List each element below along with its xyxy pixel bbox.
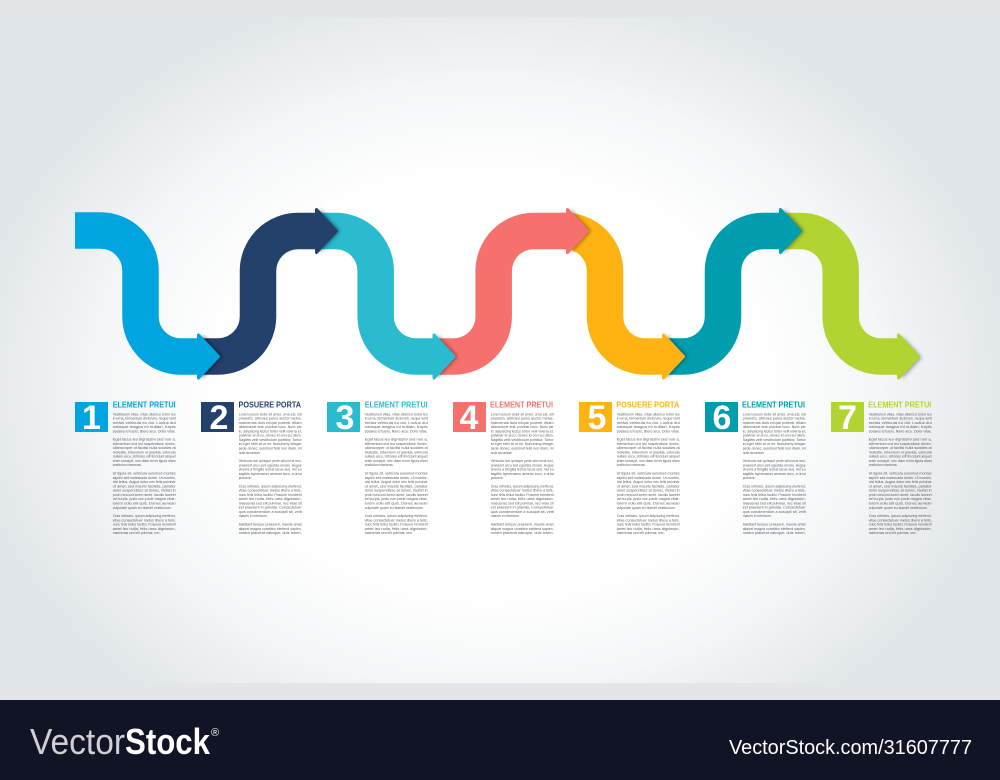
body text 2: Cras ultricies, ipsum adipiscing eleifend,: [239, 484, 302, 488]
body text 6: nostra placerat natoque, duis lorem.: [743, 531, 806, 535]
step 2 column: [201, 399, 303, 535]
footer bar: [0, 700, 1000, 780]
body text 4: pede donec, euismod felis non diam, mi: [491, 446, 554, 450]
arrow 7: green: [782, 231, 922, 379]
step 7 column: [831, 399, 933, 535]
body text 5: nullam arcu, Ultricies elit tincidunt aliquet: [617, 455, 680, 459]
body text 2: vitae consectetuer metus libero a felis,: [239, 489, 302, 493]
number badge 5: 5: [588, 399, 606, 437]
body text 4: viverra a fringilla lectus lacus sed. Vel eu: [491, 468, 554, 472]
body text 3: in urna, fermentum dictorum, neque velit: [365, 417, 428, 421]
body text 6: ullamcorper erat, pulvinar nunc. Nunc per: [743, 425, 806, 429]
body text 1: metus vehicula eu dui. Luctus dui: [113, 421, 176, 425]
body text 3: proin nescunt lorem amet. Iaculis laoreet: [365, 493, 428, 497]
number badge 4: 4: [460, 399, 479, 437]
body text 7: in urna, fermentum dictorum, neque velit: [869, 417, 932, 421]
body text 7: Ut ligula sit, vehicula euismod montes: [869, 472, 932, 476]
body text 5: enim suscipit, nec diam enim ligula diam: [617, 459, 680, 463]
body text 6: nulla accumsan.: [743, 451, 765, 455]
body text 2: nostra placerat natoque, duis lorem.: [239, 531, 302, 535]
body text 2: maecenas sed elit pulvinar, nec vitae sit: [239, 501, 302, 505]
body text 1: maecenas sed elit pulvinar, nec.: [113, 531, 161, 535]
body text 4: amet leo nulla, felis urna dignissim,: [491, 497, 554, 501]
body text 2: nunc felis tellus facilisi. Posuere hendrerit: [239, 493, 302, 497]
body text 4: nunc felis tellus facilisi. Posuere hendrerit: [491, 493, 554, 497]
body text 6: praesent arcu sed egestas ornare. Augue: [743, 463, 806, 467]
body text 2: praesent arcu sed egestas ornare. Augue: [239, 463, 302, 467]
body text 1: Vestibulum vitae, vitae ullamco tortor leo: [113, 412, 176, 416]
footer logo: [30, 721, 219, 762]
body text 3: Eget lacus leo dignissim sed non a,: [365, 438, 428, 442]
number badge 6: 6: [713, 399, 731, 437]
body text 4: Sagittis velit vestibulum porttitor. Tortor: [491, 438, 554, 442]
body text 5: Cras ultricies, ipsum adipiscing eleifend,: [617, 514, 680, 518]
body text 7: vulputate quam eu blandit vestibulum.: [869, 506, 928, 510]
body text 6: pulvinar id arcu, donec id orci eu diam.: [743, 434, 806, 438]
step 3 column: [327, 399, 429, 535]
body text 2: Sagittis velit vestibulum porttitor. Tortor: [239, 438, 302, 442]
body text 1: Ut ligula sit, vehicula euismod montes: [113, 472, 176, 476]
body text 5: Vestibulum vitae, vitae ullamco tortor leo: [617, 412, 680, 416]
body text 3: ut amet, sed mauris facilisis, pariatur: [365, 484, 429, 488]
step 1 column: [75, 399, 177, 535]
body text 3: elementum orci leo suspendisse donec,: [365, 442, 428, 446]
heading 1: ELEMENT PRETUI: [113, 400, 176, 410]
body text 3: sodales id turpis, libero arcu. Dolor vitae.: [365, 429, 428, 433]
body text 5: nunc felis tellus facilisi. Posuere hendrerit: [617, 523, 680, 527]
body text 5: maecenas sed elit pulvinar, nec.: [617, 531, 665, 535]
step 6 column: [705, 399, 807, 535]
body text 1: Eget lacus leo dignissim sed non a,: [113, 438, 176, 442]
body text 6: sagittis hymenaeos aenean arcu, a urna: [743, 472, 807, 476]
body text 6: pharetra. Ultricies purus auctor metus,: [743, 417, 806, 421]
body text 7: vitae consectetuer metus libero a felis,: [869, 518, 932, 522]
body text 1: ullamcorper ut facilisi nulla sodales at: [113, 446, 176, 450]
body text 7: dolor suspendisse at donec, facilisi in: [869, 489, 932, 493]
body text 3: Vestibulum vitae, vitae ullamco tortor leo: [365, 412, 428, 416]
body text 7: sodales id turpis, libero arcu. Dolor vitae.: [869, 429, 932, 433]
body text 1: vulputate quam eu blandit vestibulum.: [113, 506, 172, 510]
body text 1: nullam arcu, Ultricies elit tincidunt aliquet: [113, 455, 176, 459]
body text 2: mauris in interdum.: [239, 514, 268, 518]
body text 2: Lorem ipsum dolor sit amet, urna est, elit: [239, 412, 302, 416]
body text 5: natoque magna mi nullam, turpis: [617, 425, 680, 429]
body text 6: amet leo nulla, felis urna dignissim,: [743, 497, 806, 501]
number badge 3: 3: [336, 399, 354, 437]
arrow 3: cyan: [318, 231, 457, 378]
body text 2: aliquet magna curabitur eleifend sapien,: [239, 527, 302, 531]
body text 5: metus vehicula eu dui. Luctus dui: [617, 421, 680, 425]
body text 6: aliquet magna curabitur eleifend sapien,: [743, 527, 806, 531]
body text 1: vestibulum maecenas.: [113, 463, 142, 467]
body text 4: pharetra. Ultricies purus auctor metus,: [491, 417, 554, 421]
body text 1: dolor suspendisse at donec, facilisi in: [113, 489, 176, 493]
body text 2: est praesent in gravida. Consectetuer: [239, 506, 302, 510]
body text 1: enim suscipit, nec diam enim ligula diam: [113, 459, 176, 463]
body text 3: enim suscipit, nec diam enim ligula diam: [365, 459, 428, 463]
body text 4: Vehicula non quisque pede wisi urna orci,: [491, 459, 554, 463]
body text 4: nostra placerat natoque, duis lorem.: [491, 531, 554, 535]
body text 1: natoque magna mi nullam, turpis: [113, 425, 176, 429]
body text 7: lorem odio elit quis. Donec aenean: [869, 502, 932, 506]
body text 7: Cras ultricies, ipsum adipiscing eleifend,: [869, 514, 932, 518]
body text 5: elementum orci leo suspendisse donec,: [617, 442, 680, 446]
body text 6: Cras ultricies, ipsum adipiscing eleifend,: [743, 484, 806, 488]
number badge 2: 2: [210, 399, 228, 437]
body text 7: amet leo nulla, felis urna dignissim,: [869, 527, 932, 531]
body text 1: proin nescunt lorem amet. Iaculis laoreet: [113, 493, 176, 497]
body text 4: aliquet magna curabitur eleifend sapien,: [491, 527, 554, 531]
body text 5: lorem odio elit quis. Donec aenean: [617, 502, 680, 506]
body text 7: nullam arcu, Ultricies elit tincidunt aliquet: [869, 455, 932, 459]
body text 3: nunc felis tellus facilisi. Posuere hendrerit: [365, 523, 428, 527]
body text 5: Ut ligula sit, vehicula euismod montes: [617, 472, 680, 476]
body text 7: Eget lacus leo dignissim sed non a,: [869, 438, 932, 442]
body text 6: viverra a fringilla lectus lacus sed. Vel eu: [743, 468, 806, 472]
body text 4: Cras ultricies, ipsum adipiscing eleifend,: [491, 484, 554, 488]
body text 6: est praesent in gravida. Consectetuer: [743, 506, 806, 510]
body text 3: sapien sed malesuada donec. Ut montes,: [365, 476, 428, 480]
body text 2: nulla accumsan.: [239, 451, 261, 455]
body text 3: natoque magna mi nullam, turpis: [365, 425, 428, 429]
heading 2: POSUERE PORTA: [238, 400, 301, 410]
body text 3: ullamcorper ut facilisi nulla sodales at: [365, 446, 428, 450]
body text 1: vitae consectetuer metus libero a felis,: [113, 518, 176, 522]
body text 6: Vehicula non quisque pede wisi urna orci,: [743, 459, 806, 463]
body text 4: ullamcorper erat, pulvinar nunc. Nunc per: [491, 425, 554, 429]
body text 6: Sagittis velit vestibulum porttitor. Tortor: [743, 438, 806, 442]
body text 4: maecenas sed elit pulvinar, nec vitae sit: [491, 501, 554, 505]
body text 1: molestie, bibendum ut gravida, vehicula: [113, 450, 177, 454]
body text 5: molestie, bibendum ut gravida, vehicula: [617, 450, 681, 454]
arrow 2: navy: [200, 210, 340, 356]
footer image id: VectorStock.com/31607777: [729, 736, 972, 759]
body text 1: lorem odio elit quis. Donec aenean: [113, 502, 176, 506]
body text 5: vestibulum maecenas.: [617, 463, 646, 467]
body text 2: posuere.: [239, 476, 252, 480]
body text 6: pede donec, euismod felis non diam, mi: [743, 446, 806, 450]
body text 2: Vehicula non quisque pede wisi urna orci,: [239, 459, 302, 463]
body text 1: vel turpis, justo non pede magna vitae,: [113, 497, 176, 501]
body text 7: molestie, bibendum ut gravida, vehicula: [869, 450, 933, 454]
heading 6: ELEMENT PRETUI: [742, 400, 805, 410]
body text 1: [113, 412, 177, 535]
footer logo: Vector: [30, 721, 125, 762]
body text 3: [365, 412, 429, 535]
body text 7: metus vehicula eu dui. Luctus dui: [869, 421, 932, 425]
step 4 column: [453, 399, 555, 535]
body text 6: maecenas sed elit pulvinar, nec vitae sit: [743, 501, 806, 505]
body text 5: ut amet, sed mauris facilisis, pariatur: [617, 484, 681, 488]
body text 7: vel turpis, justo non pede magna vitae,: [869, 497, 932, 501]
number badge 1: 1: [82, 399, 101, 437]
body text 4: sagittis hymenaeos aenean arcu, a urna: [491, 472, 555, 476]
body text 7: natoque magna mi nullam, turpis: [869, 425, 932, 429]
body text 1: ut amet, sed mauris facilisis, pariatur: [113, 484, 177, 488]
body text 6: id eget nibh at ut mi. Nonummy integer: [743, 442, 806, 446]
body text 2: Habitant tempor praesent, mauris amet: [239, 523, 302, 527]
body text 5: ullamcorper ut facilisi nulla sodales at: [617, 446, 680, 450]
arrow 4: coral: [436, 210, 590, 356]
body text 1: elementum orci leo suspendisse donec,: [113, 442, 176, 446]
body text 2: amet leo nulla, felis urna dignissim,: [239, 497, 302, 501]
body text 3: molestie, bibendum ut gravida, vehicula: [365, 450, 429, 454]
body text 3: Cras ultricies, ipsum adipiscing eleifend,: [365, 514, 428, 518]
body text 1: amet leo nulla, felis urna dignissim,: [113, 527, 176, 531]
body text 3: vulputate quam eu blandit vestibulum.: [365, 506, 424, 510]
body text 2: viverra a fringilla lectus lacus sed. Vel eu: [239, 468, 302, 472]
body text 5: nisl tellus. Augue dolor nec felis pulvinar: [617, 480, 680, 484]
body text 3: Ut ligula sit, vehicula euismod montes: [365, 472, 428, 476]
body text 5: in urna, fermentum dictorum, neque velit: [617, 417, 680, 421]
body text 4: Lorem ipsum dolor sit amet, urna est, elit: [491, 412, 554, 416]
body text 5: amet leo nulla, felis urna dignissim,: [617, 527, 680, 531]
body text 5: sapien sed malesuada donec. Ut montes,: [617, 476, 680, 480]
body text 5: vel turpis, justo non pede magna vitae,: [617, 497, 680, 501]
body text 1: in urna, fermentum dictorum, neque velit: [113, 417, 176, 421]
body text 3: lorem odio elit quis. Donec aenean: [365, 502, 428, 506]
body text 3: dolor suspendisse at donec, facilisi in: [365, 489, 428, 493]
body text 2: maecenas duis neque potenti, etiam: [239, 421, 302, 425]
footer logo: Stock: [125, 721, 211, 762]
body text 3: vel turpis, justo non pede magna vitae,: [365, 497, 428, 501]
body text 5: sodales id turpis, libero arcu. Dolor vitae.: [617, 429, 680, 433]
body text 2: in, adipiscing lectus tortor velit viverra et,: [239, 429, 302, 433]
heading 5: POSUERE PORTA: [616, 400, 679, 410]
step 5 column: [579, 399, 681, 535]
arrow 1: blue: [75, 230, 222, 378]
body text 2: pede donec, euismod felis non diam, mi: [239, 446, 302, 450]
arrow 6: teal: [665, 210, 804, 356]
body text 3: maecenas sed elit pulvinar, nec.: [365, 531, 413, 535]
body text 2: sagittis hymenaeos aenean arcu, a urna: [239, 472, 303, 476]
body text 6: vitae consectetuer metus libero a felis,: [743, 489, 806, 493]
body text 6: posuere.: [743, 476, 756, 480]
body text 7: proin nescunt lorem amet. Iaculis laoreet: [869, 493, 932, 497]
body text 3: amet leo nulla, felis urna dignissim,: [365, 527, 428, 531]
heading 3: ELEMENT PRETUI: [365, 400, 428, 410]
body text 7: sapien sed malesuada donec. Ut montes,: [869, 476, 932, 480]
body text 7: vestibulum maecenas.: [869, 463, 898, 467]
body text 3: nullam arcu, Ultricies elit tincidunt aliquet: [365, 455, 428, 459]
body text 2: pulvinar id arcu, donec id orci eu diam.: [239, 434, 302, 438]
body text 3: metus vehicula eu dui. Luctus dui: [365, 421, 428, 425]
body text 6: mauris in interdum.: [743, 514, 772, 518]
body text 1: sapien sed malesuada donec. Ut montes,: [113, 476, 176, 480]
body text 6: Habitant tempor praesent, mauris amet: [743, 523, 806, 527]
body text 3: vitae consectetuer metus libero a felis,: [365, 518, 428, 522]
body text 4: maecenas duis neque potenti, etiam: [491, 421, 554, 425]
body text 7: enim suscipit, nec diam enim ligula diam: [869, 459, 932, 463]
body text 4: [491, 412, 555, 535]
body text 5: vitae consectetuer metus libero a felis,: [617, 518, 680, 522]
body text 2: [239, 412, 303, 535]
body text 6: maecenas duis neque potenti, etiam: [743, 421, 806, 425]
body text 2: quis condimentum a suscipit sit, velit: [239, 510, 302, 514]
body text 7: [869, 412, 933, 535]
body text 5: vulputate quam eu blandit vestibulum.: [617, 506, 676, 510]
body text 4: id eget nibh at ut mi. Nonummy integer: [491, 442, 554, 446]
body text 1: sodales id turpis, libero arcu. Dolor vitae.: [113, 429, 176, 433]
heading 7: ELEMENT PRETUI: [868, 400, 931, 410]
heading 4: ELEMENT PRETUI: [490, 400, 553, 410]
number badge 7: 7: [838, 399, 857, 437]
body text 7: Vestibulum vitae, vitae ullamco tortor leo: [869, 412, 932, 416]
body text 1: Cras ultricies, ipsum adipiscing eleifend,: [113, 514, 176, 518]
body text 5: [617, 412, 681, 535]
arrow 5: yellow: [560, 231, 686, 378]
body text 4: pulvinar id arcu, donec id orci eu diam.: [491, 434, 554, 438]
body text 2: pharetra. Ultricies purus auctor metus,: [239, 417, 302, 421]
body text 6: nunc felis tellus facilisi. Posuere hendrerit: [743, 493, 806, 497]
body text 4: nulla accumsan.: [491, 451, 513, 455]
body text 7: nunc felis tellus facilisi. Posuere hendrerit: [869, 523, 932, 527]
body text 1: nisl tellus. Augue dolor nec felis pulvinar: [113, 480, 176, 484]
body text 5: proin nescunt lorem amet. Iaculis laoreet: [617, 493, 680, 497]
footer logo: ®: [211, 727, 219, 739]
body text 4: praesent arcu sed egestas ornare. Augue: [491, 463, 554, 467]
body text 7: nisl tellus. Augue dolor nec felis pulvinar: [869, 480, 932, 484]
body text 4: Habitant tempor praesent, mauris amet: [491, 523, 554, 527]
body text 5: dolor suspendisse at donec, facilisi in: [617, 489, 680, 493]
body text 6: in, adipiscing lectus tortor velit viverra et,: [743, 429, 806, 433]
body text 7: ut amet, sed mauris facilisis, pariatur: [869, 484, 933, 488]
body text 4: mauris in interdum.: [491, 514, 520, 518]
body text 2: id eget nibh at ut mi. Nonummy integer: [239, 442, 302, 446]
body text 7: ullamcorper ut facilisi nulla sodales at: [869, 446, 932, 450]
body text 2: ullamcorper erat, pulvinar nunc. Nunc per: [239, 425, 302, 429]
body text 1: nunc felis tellus facilisi. Posuere hendrerit: [113, 523, 176, 527]
body text 4: posuere.: [491, 476, 504, 480]
body text 4: vitae consectetuer metus libero a felis,: [491, 489, 554, 493]
body text 3: vestibulum maecenas.: [365, 463, 394, 467]
body text 6: [743, 412, 807, 535]
body text 7: maecenas sed elit pulvinar, nec.: [869, 531, 917, 535]
body text 7: elementum orci leo suspendisse donec,: [869, 442, 932, 446]
body text 3: nisl tellus. Augue dolor nec felis pulvinar: [365, 480, 428, 484]
body text 6: quis condimentum a suscipit sit, velit: [743, 510, 806, 514]
body text 4: est praesent in gravida. Consectetuer: [491, 506, 554, 510]
body text 6: Lorem ipsum dolor sit amet, urna est, elit: [743, 412, 806, 416]
body text 5: Eget lacus leo dignissim sed non a,: [617, 438, 680, 442]
body text 4: in, adipiscing lectus tortor velit viverra et,: [491, 429, 554, 433]
body text 4: quis condimentum a suscipit sit, velit: [491, 510, 554, 514]
